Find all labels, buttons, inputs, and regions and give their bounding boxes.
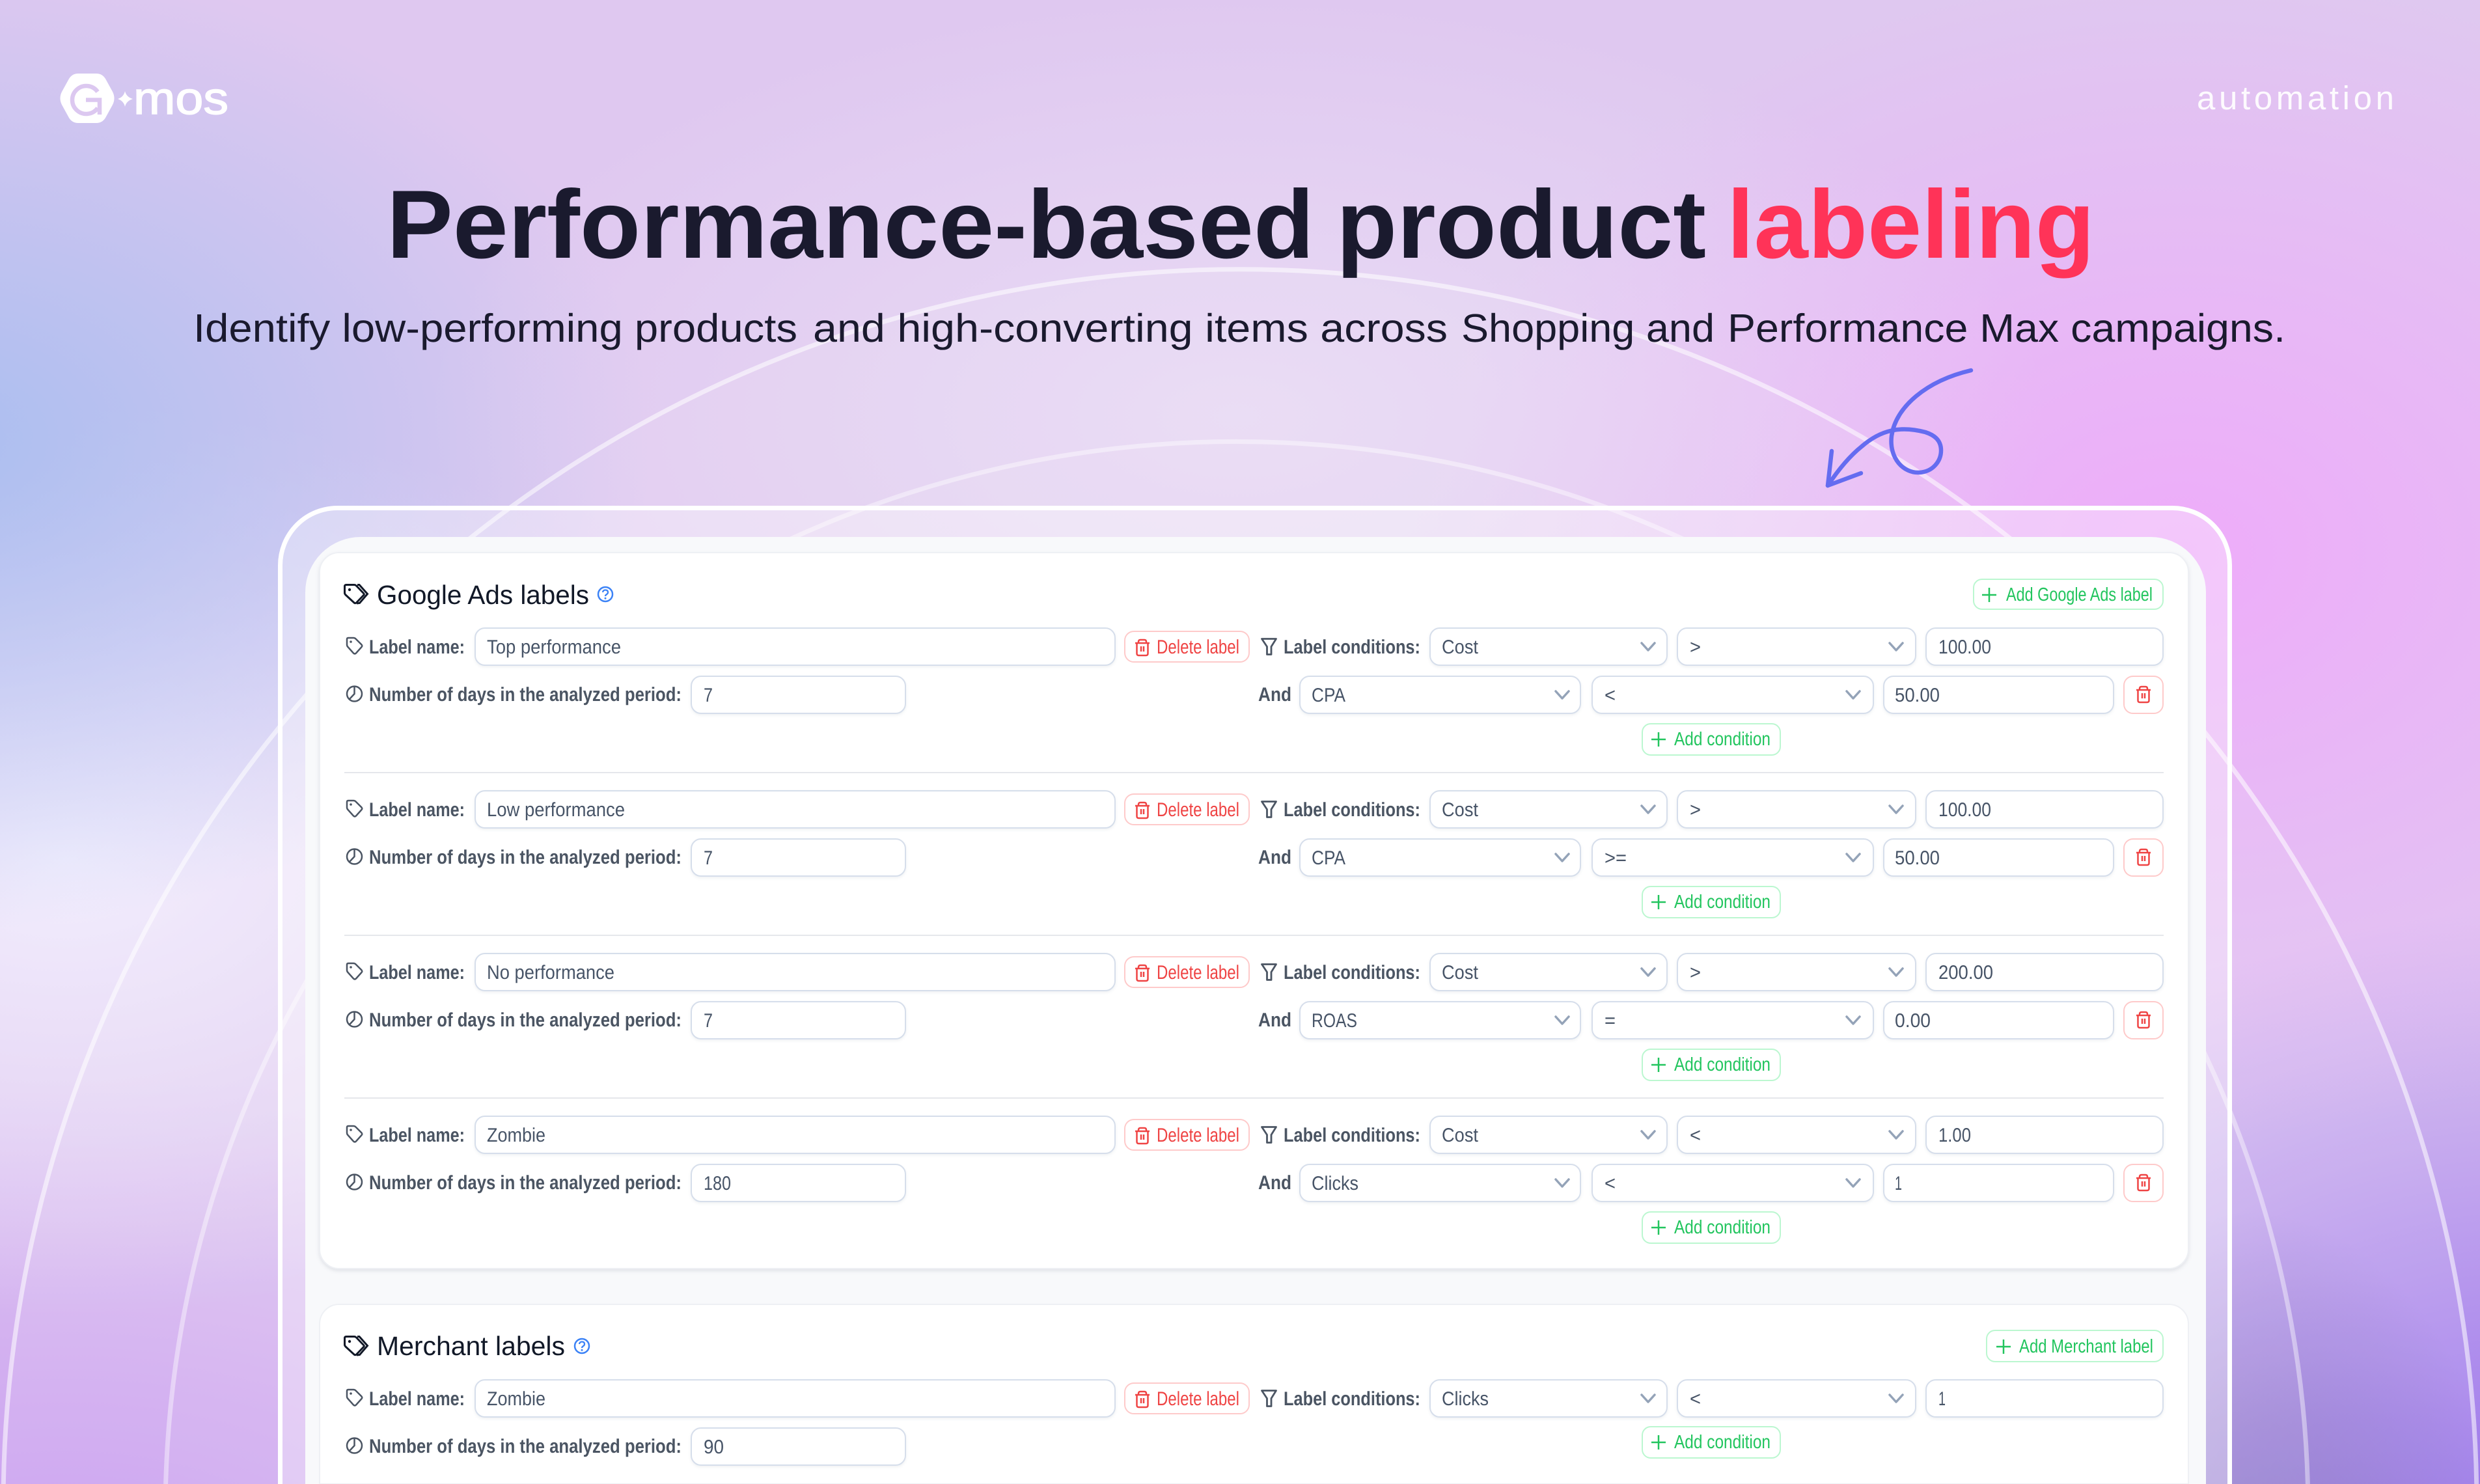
label name field: Zombie: [487, 1125, 545, 1146]
condition one: [1261, 628, 2163, 665]
icon: hexagon G: [60, 74, 115, 123]
condition two: <: [1605, 1173, 1616, 1194]
icon: help: [575, 1339, 589, 1353]
panel: Merchant labels: [320, 1304, 2188, 1484]
label row: Low performance: [347, 791, 2163, 918]
condition two: CPA: [1312, 847, 1345, 869]
label name field: Zombie: [487, 1388, 545, 1410]
condition one: [1261, 791, 2163, 828]
logo: [60, 73, 228, 124]
condition one: Label conditions:: [1284, 1125, 1420, 1146]
subtitle: Shopping and: [1461, 306, 1715, 350]
label name field: Label name:: [369, 962, 465, 983]
condition two: [1258, 839, 2163, 876]
title: [387, 170, 2095, 279]
add condition button: Add condition: [1674, 729, 1770, 750]
label name field: Top performance: [487, 637, 621, 658]
button: add Google Ads label: Add Google Ads label: [2006, 584, 2153, 605]
title: word two: product: [1336, 170, 1706, 279]
delete label button: Delete label: [1157, 962, 1239, 983]
panel: glass frame: [280, 508, 2230, 1484]
condition one: Clicks: [1442, 1388, 1489, 1410]
condition two: [1258, 1002, 2163, 1039]
condition one: Cost: [1442, 637, 1479, 658]
condition two: >=: [1605, 847, 1627, 869]
condition two: <: [1605, 685, 1616, 706]
title: highlighted word: labeling: [1727, 170, 2095, 279]
days field: [347, 676, 905, 713]
condition two: CPA: [1312, 685, 1345, 706]
heading: Google Ads labels: [345, 580, 613, 610]
wordmark: mos: [133, 73, 228, 124]
condition two: And: [1258, 847, 1291, 868]
label name field: Label name:: [369, 1125, 465, 1146]
heading: Merchant labels: [345, 1331, 589, 1361]
condition one: 100.00: [1938, 799, 1991, 821]
label name field: Label name:: [369, 637, 465, 658]
condition one: Cost: [1442, 962, 1479, 983]
days field: 7: [704, 847, 713, 869]
condition one: Cost: [1442, 799, 1479, 821]
condition two: And: [1258, 1172, 1291, 1194]
condition two: =: [1605, 1010, 1616, 1032]
condition one: 1.00: [1938, 1125, 1971, 1146]
days field: [347, 1428, 905, 1465]
days field: Number of days in the analyzed period:: [369, 684, 682, 706]
condition one: [1261, 1380, 2163, 1417]
condition one: >: [1690, 799, 1701, 821]
add condition button: [1642, 1049, 1780, 1080]
delete label button: [1125, 957, 1249, 987]
panel: Google Ads labels: [320, 553, 2188, 1269]
heading text: Google Ads labels: [377, 580, 589, 610]
condition one: Label conditions:: [1284, 962, 1420, 983]
condition two: 0.00: [1895, 1010, 1931, 1032]
subtitle: and high-converting items across: [813, 306, 1448, 350]
condition two: [1258, 676, 2163, 713]
condition one: >: [1690, 962, 1701, 983]
add condition button: [1642, 886, 1780, 918]
label name field: No performance: [487, 962, 614, 983]
label name field: Label name:: [369, 1388, 465, 1410]
delete label button: Delete label: [1157, 799, 1239, 821]
days field: [347, 839, 905, 876]
delete label button: Delete label: [1157, 1388, 1239, 1410]
condition two: ROAS: [1312, 1010, 1357, 1032]
delete label button: [1125, 631, 1249, 662]
days field: [347, 1164, 905, 1202]
condition one: [1261, 954, 2163, 991]
delete label button: [1125, 1383, 1249, 1414]
days field: 7: [704, 685, 713, 706]
icon: tags: [345, 584, 367, 603]
tag: automation: automation: [2197, 79, 2394, 117]
label row: Zombie merchant: [347, 1380, 2163, 1465]
delete label button: [1125, 794, 1249, 825]
icon: hand-drawn arrow: [1828, 370, 1971, 486]
label row: Top performance: [347, 628, 2163, 755]
condition one: >: [1690, 637, 1701, 658]
subtitle: Identify low-performing products: [193, 306, 797, 350]
condition one: 200.00: [1938, 962, 1993, 983]
days field: 7: [704, 1010, 713, 1032]
condition two: And: [1258, 1010, 1291, 1031]
add condition button: [1642, 1427, 1780, 1458]
condition one: 1: [1938, 1388, 1946, 1410]
add condition button: Add condition: [1674, 1054, 1770, 1075]
add condition button: [1642, 1212, 1780, 1243]
days field: 90: [704, 1436, 724, 1458]
button: add Merchant label: [1987, 1330, 2163, 1362]
condition two: 50.00: [1895, 847, 1940, 869]
days field: Number of days in the analyzed period:: [369, 1172, 682, 1194]
label name field: [347, 1116, 1115, 1153]
condition one: <: [1690, 1125, 1701, 1146]
days field: 180: [704, 1173, 731, 1194]
label row: No performance: [347, 954, 2163, 1080]
button: add Google Ads label: [1974, 579, 2163, 609]
delete label button: [1125, 1120, 1249, 1150]
condition one: [1261, 1116, 2163, 1153]
label name field: Label name:: [369, 799, 465, 821]
days field: Number of days in the analyzed period:: [369, 1436, 682, 1457]
condition one: Label conditions:: [1284, 637, 1420, 658]
subtitle: [193, 306, 2285, 350]
condition one: 100.00: [1938, 637, 1991, 658]
condition one: <: [1690, 1388, 1701, 1410]
days field: [347, 1002, 905, 1039]
add condition button: Add condition: [1674, 1217, 1770, 1238]
days field: Number of days in the analyzed period:: [369, 847, 682, 868]
add condition button: Add condition: [1674, 892, 1770, 913]
label name field: [347, 628, 1115, 665]
panel: app background: [305, 537, 2206, 1484]
subtitle: Performance Max campaigns.: [1728, 306, 2285, 350]
condition two: 1: [1895, 1173, 1902, 1194]
icon: tags: [345, 1337, 367, 1355]
icon: help: [598, 587, 613, 601]
title: word one: Performance-based: [387, 170, 1314, 279]
condition two: Clicks: [1312, 1173, 1358, 1194]
condition one: Cost: [1442, 1125, 1479, 1146]
condition two: [1258, 1164, 2163, 1202]
condition one: Label conditions:: [1284, 1388, 1420, 1410]
heading text: Merchant labels: [377, 1331, 565, 1361]
delete label button: Delete label: [1157, 637, 1239, 658]
days field: Number of days in the analyzed period:: [369, 1010, 682, 1031]
icon: sparkle: [118, 91, 133, 107]
condition one: Label conditions:: [1284, 799, 1420, 821]
label name field: [347, 791, 1115, 828]
button: add Merchant label: Add Merchant label: [2019, 1336, 2153, 1357]
label row: Zombie: [347, 1116, 2163, 1243]
add condition button: [1642, 724, 1780, 755]
condition two: 50.00: [1895, 685, 1940, 706]
add condition button: Add condition: [1674, 1432, 1770, 1453]
label name field: Low performance: [487, 799, 625, 821]
label name field: [347, 1380, 1115, 1417]
label name field: [347, 954, 1115, 991]
condition two: And: [1258, 684, 1291, 706]
delete label button: Delete label: [1157, 1125, 1239, 1146]
